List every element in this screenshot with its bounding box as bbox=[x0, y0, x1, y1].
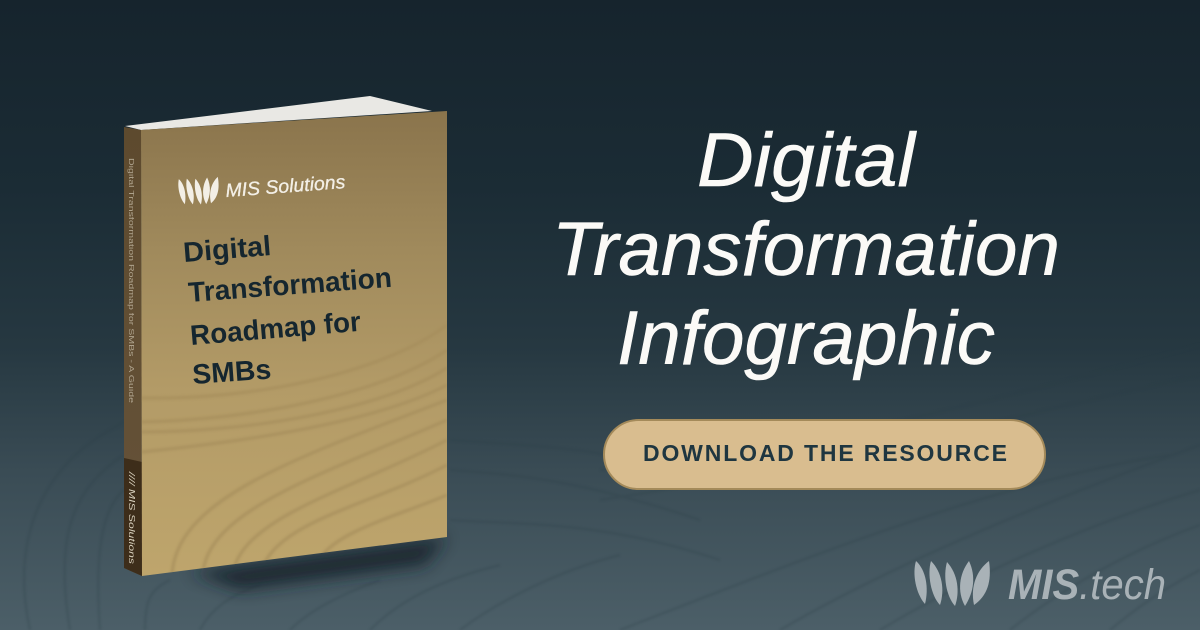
spine title: Digital Transformation Roadmap for SMBs - A Guide bbox=[127, 158, 134, 403]
cover title: Transformation bbox=[187, 262, 393, 308]
cover title: Digital bbox=[182, 230, 272, 268]
main title bbox=[552, 118, 1060, 381]
main title: Digital bbox=[697, 118, 917, 203]
main title: Transformation bbox=[552, 207, 1060, 292]
cover wood grain bbox=[142, 391, 446, 572]
cover title: Roadmap for bbox=[189, 306, 362, 351]
cover title: SMBs bbox=[191, 354, 272, 390]
book pages bbox=[125, 96, 432, 130]
book cover bbox=[141, 111, 447, 576]
footer logo bbox=[914, 561, 1166, 609]
cover logo text: MIS Solutions bbox=[225, 172, 347, 202]
footer logo text: MIS.tech bbox=[1008, 561, 1166, 609]
cover title bbox=[182, 230, 393, 390]
download button bbox=[604, 420, 1045, 489]
book bbox=[124, 96, 447, 576]
spine logo: //// MIS Solutions bbox=[127, 470, 136, 564]
spine footer band bbox=[124, 458, 142, 576]
book shadow bbox=[190, 537, 447, 590]
book spine bbox=[124, 127, 142, 576]
download button: DOWNLOAD THE RESOURCE bbox=[643, 440, 1007, 466]
cover logo bbox=[178, 172, 347, 206]
main title: Infographic bbox=[617, 296, 995, 381]
cover logo mark bbox=[178, 177, 219, 206]
footer logo mark bbox=[914, 561, 990, 606]
